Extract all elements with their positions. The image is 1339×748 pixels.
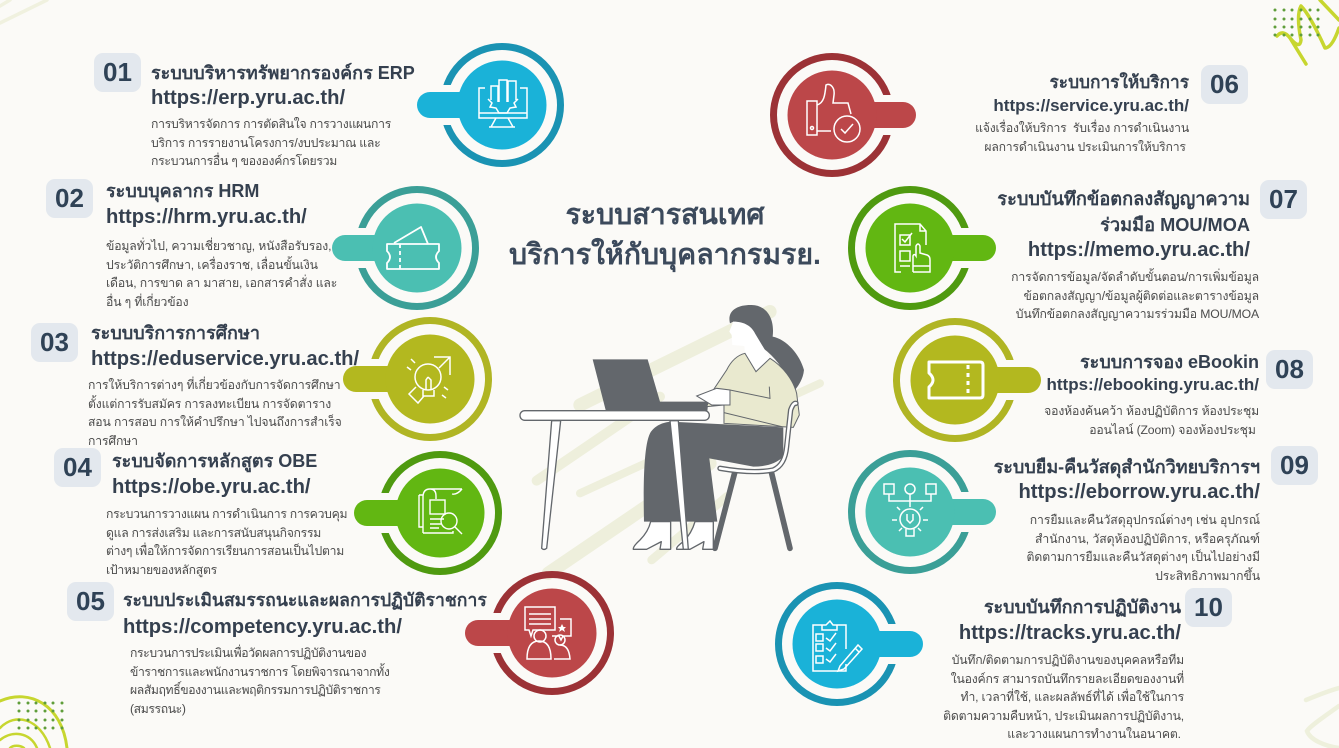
laptop [593,359,708,411]
heading 01: ระบบบริหารทรัพยากรองค์กร ERP [151,63,415,83]
illustration: woman at a laptop [520,305,820,573]
description 07: บันทึกข้อตกลงสัญญาความรร่วมมือ MOU/MOA [1016,307,1259,321]
description 09 [1026,513,1260,583]
decoration: bottom-right scribble [1306,688,1339,748]
decoration: top-right scribble and dots [1274,0,1339,64]
description 02: ข้อมูลทั่วไป, ความเชี่ยวชาญ, หนังสือรับรอง, [106,239,331,253]
description 02: ประวัติการศึกษา, เครื่องราช, เลื่อนขั้นเงิน [106,258,318,272]
panel: 09 eBorrow [994,446,1318,583]
number 03 [31,323,78,362]
url 06: https://service.yru.ac.th/ [993,96,1189,115]
description 08: ออนไลน์ (Zoom) จองห้องประชุม [1089,423,1256,437]
number 04 [54,448,101,487]
number 10: 10 [1194,592,1223,622]
description 09: ติดตามการยืมและคืนวัสดุต่างๆ เป็นไปอย่างมี [1026,550,1260,564]
url 08: https://ebooking.yru.ac.th/ [1046,375,1259,394]
description 03 [88,376,342,448]
panel: 06 service [975,65,1248,154]
heading 09: ระบบยืม-คืนวัสดุสำนักวิทยบริการฯ [994,457,1260,477]
number 08: 08 [1275,354,1304,384]
description 08: จองห้องค้นคว้า ห้องปฏิบัติการ ห้องประชุม [1044,404,1259,418]
shoes [633,522,713,549]
description 01 [151,117,391,168]
description 09: ประสิทธิภาพมากขึ้น [1155,569,1260,583]
title: บริการให้กับบุคลากรมรย. [509,239,821,271]
title [509,199,821,272]
description 07: ข้อตกลงสัญญา/ข้อมูลผู้ติดต่อและตารางข้อมูล [1024,289,1259,303]
decoration: bottom-left arcs and dots [0,697,67,748]
forearm [697,388,730,405]
description 04: ดูแล การส่งเสริม และการสนับสนุนกิจกรรม [106,526,321,540]
circle 10 [778,586,923,702]
description 06: ผลการดำเนินงาน ประเมินการให้บริการ [984,140,1186,154]
description 03: ตั้งแต่การรับสมัคร การลงทะเบียน การจัดตาราง [88,397,331,411]
url 10: https://tracks.yru.ac.th/ [959,622,1181,644]
circle 08 [896,322,1041,438]
description 03: การศึกษา [88,434,138,448]
description 06 [975,120,1189,154]
description 02: อื่น ๆ ที่เกี่ยวข้อง [106,295,188,309]
heading 02: ระบบบุคลากร HRM [106,181,259,201]
description 06: แจ้งเรื่องให้บริการ รับเรื่อง การดำเนินงาน [975,121,1189,135]
panel: 08 eBooking [1044,350,1313,438]
description 05: ผลสัมฤทธิ์ของงานและพฤติกรรมการปฏิบัติราชการ [130,683,380,697]
title: ระบบสารสนเทศ [566,199,764,231]
description 10: ทำ, เวลาที่ใช้, และผลลัพธ์ที่ได้ เพื่อใช้ในการ [960,690,1184,704]
heading 03: ระบบบริการการศึกษา [91,323,260,343]
table top and right leg [670,421,688,549]
panel: 02 HRM [46,179,337,309]
number 08 [1266,350,1313,389]
url 03: https://eduservice.yru.ac.th/ [91,348,359,370]
panel: 05 competency [67,582,487,716]
url 05: https://competency.yru.ac.th/ [123,616,402,638]
number 07: 07 [1269,184,1298,214]
url 09: https://eborrow.yru.ac.th/ [1018,481,1260,503]
heading 08: ระบบการจอง eBookin [1080,352,1259,372]
url 04: https://obe.yru.ac.th/ [112,476,311,498]
description 03: การให้บริการต่างๆ ที่เกี่ยวข้องกับการจัดการศึกษา [88,378,341,392]
description 10: บันทึก/ติดตามการปฏิบัติงานของบุคคลหรือทีม [952,653,1184,667]
number 05: 05 [76,586,105,616]
number 01: 01 [103,57,132,87]
description 05: กระบวนการประเมินเพื่อวัดผลการปฏิบัติงานของ [130,646,366,660]
trousers [644,422,783,522]
circle 05 [465,574,610,692]
circle 06 [774,56,916,174]
description 01: กระบวนการอื่น ๆ ขององค์กรโดยรวม [151,154,337,168]
panel: 04 OBE [54,448,347,578]
description 10: และวางแผนการทำงานในอนาคต. [1007,727,1181,741]
description 10: ในองค์กร สามารถบันทึกรายละเอียดของงานที่ [951,672,1184,686]
number 02: 02 [55,183,84,213]
description 04 [106,507,347,578]
description 04: ต่างๆ เพื่อให้การจัดการเรียนการสอนเป็นไปตาม [106,544,344,558]
heading 04: ระบบจัดการหลักสูตร OBE [112,451,317,471]
description 05 [130,644,389,716]
description 02 [106,238,337,309]
number 06: 06 [1210,69,1239,99]
description 01: บริการ การรายงานโครงการ/งบประมาณ และ [151,136,380,150]
circle 02 [332,190,476,306]
number 09 [1271,446,1318,485]
heading 05: ระบบประเมินสมรรถนะและผลการปฏิบัติราชการ [123,590,487,610]
circle 09 [852,454,996,570]
description 07: การจัดการข้อมูล/จัดลำดับขั้นตอน/การเพิ่มข้อมูล [1011,270,1259,284]
description 02: เดือน, การขาด ลา มาสาย, เอกสารคำสั่ง และ [106,276,337,290]
number 10 [1185,588,1232,627]
number 01 [94,53,141,92]
description 09: สำนักงาน, วัสดุห้องปฏิบัติการ, หรือครุภัณฑ์ [1035,532,1260,546]
face and neck [729,322,770,372]
description 03: สอน การสอบ การให้คำปรึกษา ไปจนถึงการสำเร็จ [88,415,342,429]
description 07 [1011,268,1260,321]
description 05: (สมรรถนะ) [130,702,186,716]
heading 07: ร่วมมือ MOU/MOA [1100,215,1250,235]
number 02 [46,179,93,218]
number 06 [1201,65,1248,104]
chair [715,472,790,548]
description 08 [1044,404,1259,438]
panel: 10 tracks [943,588,1232,741]
left table leg [542,421,561,549]
circle 07 [852,190,996,306]
circle 04 [354,454,498,572]
circle 03 [343,320,488,438]
decoration: top-left scribble [0,0,47,23]
chair seat and back [720,403,796,472]
description 01: การบริหารจัดการ การตัดสินใจ การวางแผนการ [151,117,391,131]
number 04: 04 [63,452,92,482]
description 09: การยืมและคืนวัสดุอุปกรณ์ต่างๆ เช่น อุปกรณ์ [1030,513,1260,527]
url 07: https://memo.yru.ac.th/ [1028,239,1250,261]
sweater [707,353,799,427]
panel: 03 education service [31,323,359,448]
panel: 01 ERP [94,53,415,168]
circle 01 [417,46,560,164]
heading 07: ระบบบันทึกข้อตกลงสัญญาความ [997,189,1250,209]
number 09: 09 [1280,450,1309,480]
heading 10: ระบบบันทึกการปฏิบัติงาน [984,597,1181,617]
number 03: 03 [40,327,69,357]
url 01: https://erp.yru.ac.th/ [151,87,345,109]
heading 06: ระบบการให้บริการ [1050,72,1189,92]
number 05 [67,582,114,621]
description 10: ติดตามความคืบหน้า, ประเมินผลการปฏิบัติงาน, [943,709,1184,723]
hair [729,305,804,390]
description 10 [943,653,1184,741]
description 04: กระบวนการวางแผน การดำเนินการ การควบคุม [106,507,347,521]
url 02: https://hrm.yru.ac.th/ [106,206,307,228]
description 04: เป้าหมายของหลักสูตร [106,563,217,577]
panel: 07 MOU/MOA [997,180,1307,321]
number 07 [1260,180,1307,219]
description 05: ข้าราชการและพนักงานราชการ โดยพิจารณาจากทั้ง [130,665,389,679]
heading 07 [997,189,1250,235]
